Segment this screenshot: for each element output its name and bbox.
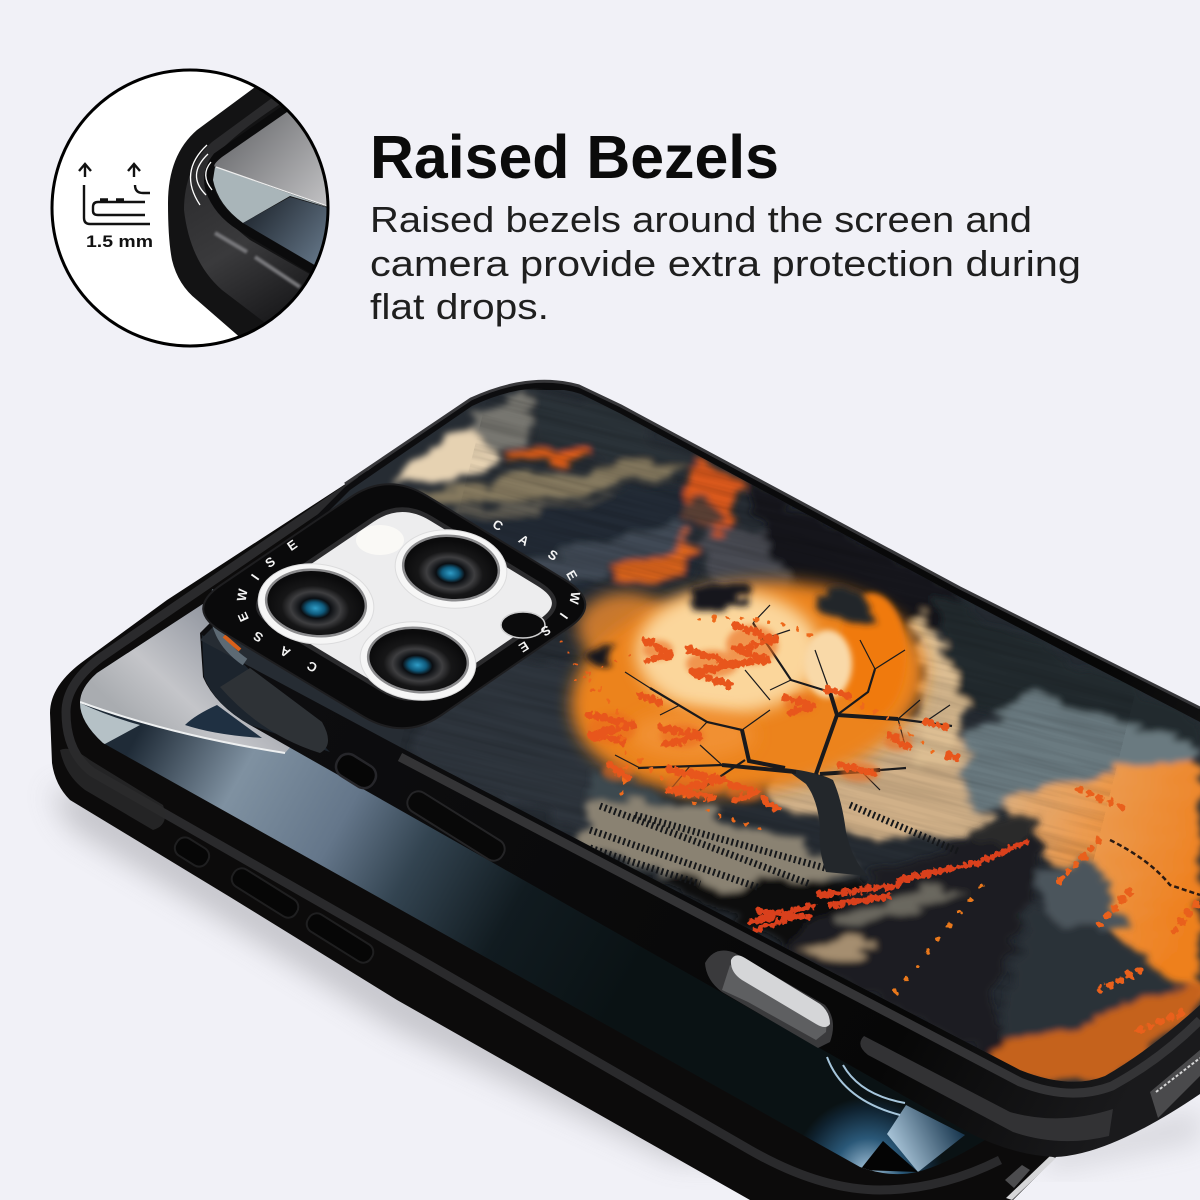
icon: raised bezel diagram <box>79 164 150 224</box>
CASEWISE lettering, left arc: A <box>277 643 293 661</box>
tree twigs <box>615 605 950 790</box>
inset screen dark <box>243 197 332 275</box>
black embers by camera <box>560 640 640 700</box>
lower phone corner bumper <box>60 749 165 830</box>
grey smoke column <box>705 525 800 600</box>
side button one <box>171 834 213 870</box>
inset bezel grey <box>184 98 320 325</box>
tree <box>615 605 952 876</box>
right shadow <box>1040 1110 1200 1170</box>
tan streak one <box>420 462 690 506</box>
orange flame plume <box>684 458 745 528</box>
right orange wash <box>1000 755 1200 1000</box>
CASEWISE lettering, left arc: S <box>262 553 278 571</box>
CASEWISE lettering, right arc: E <box>516 638 532 656</box>
screen wallpaper dark blob <box>185 705 262 738</box>
dark smoke near sun right <box>810 590 880 625</box>
lens 1 <box>254 558 378 650</box>
grey blue haze <box>955 690 1200 805</box>
icon: raised lip <box>135 185 150 193</box>
tree outer branches <box>638 623 952 790</box>
rock outcrop <box>967 812 1040 850</box>
lower phone screen <box>80 604 984 1174</box>
inset white wave arcs <box>191 145 212 205</box>
right tree branches <box>1110 840 1200 895</box>
measurement label: 1.5 mm <box>86 232 153 251</box>
sun outer orange body <box>557 560 939 816</box>
CASEWISE lettering, right arc: A <box>516 531 532 549</box>
dark top sky <box>520 392 700 470</box>
inset highlight on bumper <box>215 233 300 287</box>
foreground orange glow <box>970 985 1200 1085</box>
brown orange sky left of sun <box>577 592 673 664</box>
upper case body <box>200 380 1200 1157</box>
screen base gradient <box>80 604 984 1163</box>
grey smear <box>529 518 694 584</box>
CASEWISE lettering, right arc: I <box>557 610 571 622</box>
wallpaper blue arcs <box>827 1057 905 1115</box>
description text: flat drops. <box>370 286 549 327</box>
black foreground <box>640 874 905 958</box>
ember dots <box>590 618 940 830</box>
dark rocks <box>780 818 1040 1076</box>
right tree leaves <box>1060 790 1200 1030</box>
inset rim dark <box>209 108 317 272</box>
inset screen pale <box>213 167 330 223</box>
lens 2 <box>391 524 511 614</box>
lidar sensor <box>501 612 545 638</box>
CASEWISE lettering, left arc: W <box>234 587 251 602</box>
left dark blot <box>590 645 615 668</box>
CASEWISE lettering, right arc: E <box>563 568 581 583</box>
title: Raised Bezels <box>370 123 779 191</box>
art base <box>200 390 1200 1090</box>
wallpaper white arc <box>80 702 285 753</box>
screen pale wedge <box>80 703 140 744</box>
icon: device profile <box>93 202 145 215</box>
CASEWISE lettering, left arc: E <box>234 610 252 624</box>
wallpaper blue glow <box>806 1100 939 1174</box>
description text: Raised bezels around the screen and <box>370 199 1032 240</box>
inset divider line <box>216 167 330 207</box>
description text <box>370 199 1081 327</box>
CASEWISE lettering, right arc: C <box>490 516 506 534</box>
leaf foliage haze <box>588 625 912 802</box>
silver side button side wall <box>722 965 827 1040</box>
sky blue grey under left <box>590 775 680 815</box>
sun lower orange <box>630 711 754 759</box>
orange wisp <box>615 532 702 586</box>
bumper patch near camera <box>220 668 328 753</box>
top left cream clouds <box>392 426 500 482</box>
upper case rim light <box>345 381 1200 708</box>
lower left dark sky <box>414 662 600 827</box>
right dark sky <box>930 590 1200 770</box>
black storm swirl <box>745 480 960 640</box>
icon: right arrow <box>128 164 140 177</box>
bumper patch bottom corner <box>860 1036 1113 1141</box>
upper case lower rim highlight <box>400 757 1200 1093</box>
lower phone rim highlight <box>66 480 1000 1190</box>
drop shadow under phones <box>50 790 760 1160</box>
side button three <box>303 910 377 966</box>
art ring sliver under island <box>214 590 245 662</box>
grey cloud <box>470 392 535 455</box>
painterly brush streak overlay <box>468 398 1126 870</box>
orange top streak <box>499 449 591 465</box>
tree trunk <box>784 768 868 876</box>
screen upper grey wallpaper <box>80 604 290 753</box>
icon: case profile <box>84 185 150 224</box>
CASEWISE lettering, left arc: C <box>304 658 320 676</box>
rock grey stripes <box>830 885 965 928</box>
sun pale disc <box>636 590 820 714</box>
silver side button recess <box>705 951 833 1048</box>
inset phone corner <box>168 82 330 340</box>
inset white disc <box>52 70 328 346</box>
inset outline <box>52 70 328 346</box>
autumn leaves <box>560 618 1200 1030</box>
CASEWISE lettering, left arc: S <box>250 628 266 646</box>
mute switch opening <box>332 750 380 792</box>
icon: device bumps <box>100 198 124 202</box>
lower phone case body <box>50 470 1058 1200</box>
port serrated highlight <box>1156 1058 1200 1092</box>
ring sliver orange fleck <box>224 636 240 650</box>
tan streak two <box>452 492 616 523</box>
sun orange deep ring <box>838 593 906 717</box>
artwork: autumn tree painting <box>200 354 1200 1090</box>
sun pale swirl <box>804 630 852 698</box>
CASEWISE lettering, right arc: W <box>566 591 583 606</box>
rock tan highlight <box>795 936 880 958</box>
camera plateau <box>258 510 554 699</box>
silver side button face <box>731 955 830 1027</box>
bottom port silver <box>1005 1165 1030 1188</box>
inset circle: bezel close-up <box>52 70 335 346</box>
black blot over sun <box>690 580 750 612</box>
phone: lower phone seen from front <box>50 470 1058 1200</box>
volume button <box>404 788 508 864</box>
left end translucent tint <box>202 635 330 752</box>
icon: left arrow <box>79 164 91 177</box>
screen black wedge <box>860 1141 918 1172</box>
camera bezel outer <box>203 484 585 728</box>
CASEWISE lettering, left arc: E <box>284 536 300 554</box>
camera island <box>203 484 585 728</box>
bottom port silver <box>1150 1050 1200 1118</box>
CASEWISE lettering, left arc: I <box>248 571 262 583</box>
ridge leaves <box>885 875 990 1005</box>
grey blue haze low right <box>1030 860 1135 930</box>
pale sky below sun <box>770 700 1000 845</box>
CASEWISE lettering, right arc: S <box>538 622 554 640</box>
lens 3 <box>356 616 480 706</box>
CASEWISE lettering, right arc: S <box>545 546 561 564</box>
tan cloud right of sun <box>912 615 968 770</box>
inset screen upper <box>214 112 335 207</box>
CASEWISE lettering, right arc <box>490 516 583 656</box>
description text: camera provide extra protection during <box>370 243 1081 284</box>
wallpaper pale fan <box>887 1105 965 1172</box>
flash <box>356 525 404 555</box>
field fence lines <box>590 805 960 888</box>
tree main branches <box>722 692 898 774</box>
phone: upper phone case back <box>200 380 1200 1157</box>
CASEWISE lettering, left arc <box>234 536 320 676</box>
plume ember core <box>682 496 718 524</box>
bottom silver detail <box>1006 1156 1056 1200</box>
side button two <box>228 865 302 921</box>
dark blue smoke <box>497 482 702 588</box>
fallen red leaves <box>750 840 1030 930</box>
far hill <box>1000 905 1200 1060</box>
field grey <box>585 800 860 890</box>
crown clusters <box>725 625 775 665</box>
